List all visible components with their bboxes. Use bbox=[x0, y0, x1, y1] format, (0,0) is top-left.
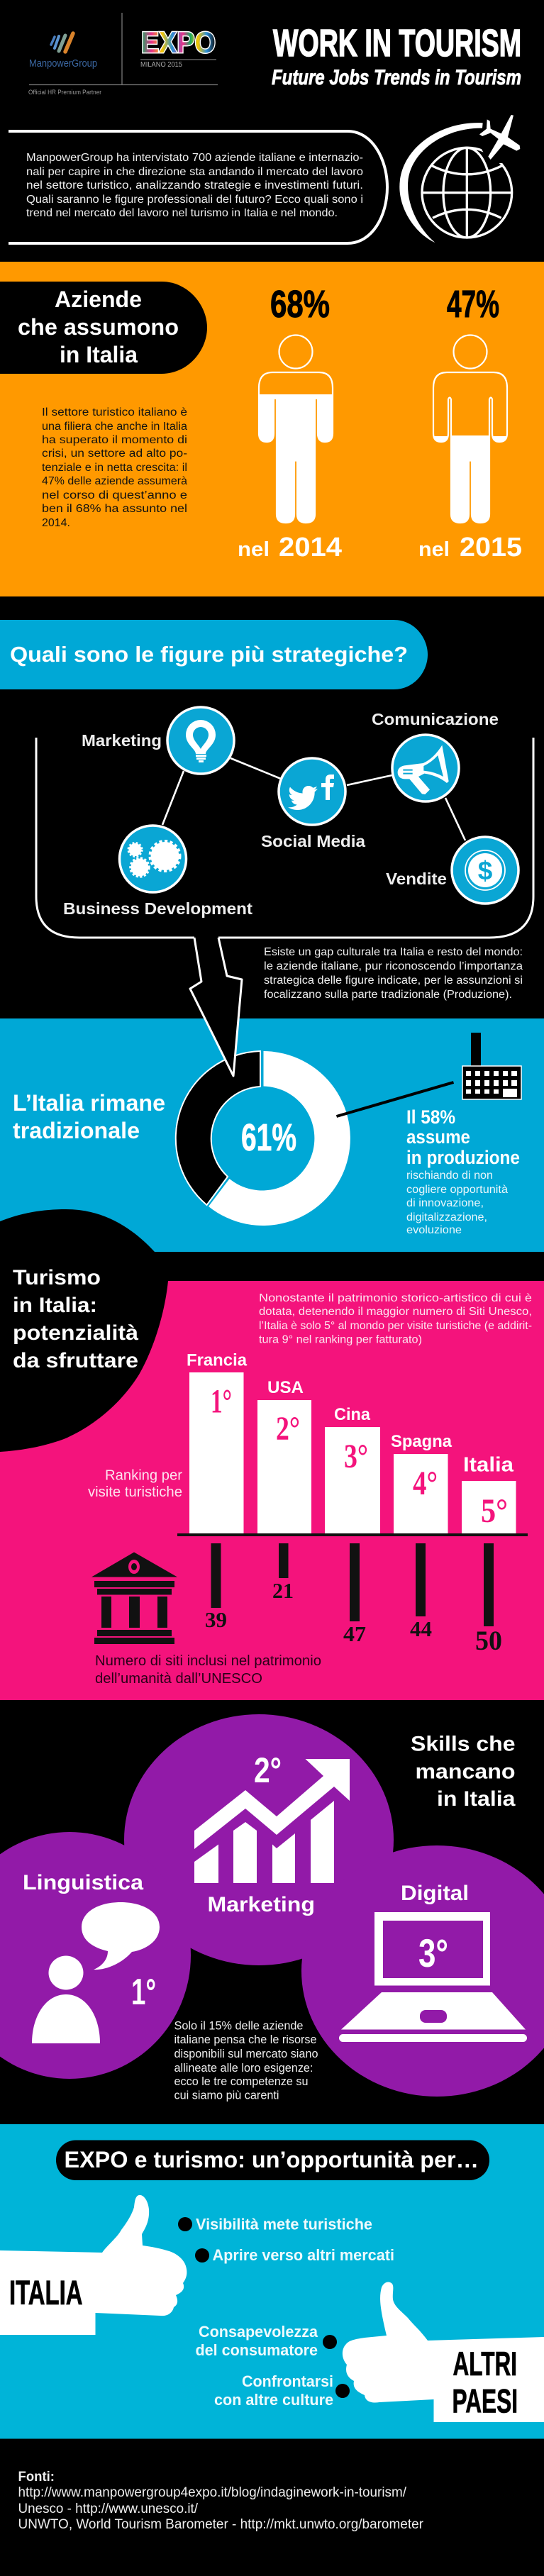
bullet: Visibilità: Visibilità mete turistiche bbox=[196, 2216, 372, 2233]
panel: header bbox=[9, 13, 521, 243]
callout detail bbox=[406, 1170, 508, 1236]
heading: da sfruttare bbox=[13, 1349, 138, 1372]
intro text: nali per capire in che direzione sta andando il mercato del lavoro bbox=[26, 166, 363, 178]
sources: UNWTO, World Tourism Barometer - http://mkt.unwto.org/barometer bbox=[18, 2517, 424, 2532]
logo: EXPO Milano 2015: EXPO bbox=[141, 26, 216, 59]
node: Marketing bbox=[82, 707, 234, 774]
ranking label: visite turistiche bbox=[88, 1484, 182, 1500]
bar chart: ranking bbox=[177, 1350, 528, 1536]
bullet: Consapevolezza: del consumatore bbox=[196, 2341, 318, 2359]
label: nel 2014: 2014 bbox=[279, 533, 342, 562]
icon: factory bbox=[462, 1033, 521, 1099]
icon: light bulb bbox=[186, 720, 216, 762]
bar chart: UNESCO sites: 50 bbox=[475, 1626, 502, 1656]
ranking label: Ranking per bbox=[105, 1468, 182, 1484]
node: Vendite bbox=[386, 837, 518, 904]
intro text bbox=[259, 1292, 532, 1346]
icon: temple bbox=[91, 1552, 177, 1644]
callout detail: rischiando di non bbox=[406, 1170, 493, 1182]
blob: Digital bbox=[301, 1845, 544, 2097]
heading: mancano bbox=[416, 1760, 515, 1783]
callout: 58%: in produzione bbox=[406, 1147, 520, 1168]
cyan background bbox=[0, 2124, 544, 2438]
body text: 2014. bbox=[42, 517, 70, 529]
node: Comunicazione: Comunicazione bbox=[372, 710, 499, 728]
bracket and arrow bbox=[36, 738, 533, 1076]
icon: globe and plane bbox=[399, 115, 520, 243]
label: nel 2015 bbox=[418, 533, 522, 562]
donut chart bbox=[176, 1051, 350, 1226]
icon: megaphone bbox=[398, 745, 449, 794]
heading: Turismo bbox=[13, 1266, 101, 1289]
callout detail: di innovazione, bbox=[406, 1197, 484, 1209]
bar: Francia: Francia bbox=[187, 1350, 248, 1370]
heading bbox=[13, 1266, 138, 1372]
sources: Fonti: bbox=[18, 2470, 55, 2485]
intro text bbox=[26, 152, 363, 219]
callout detail: evoluzione bbox=[406, 1224, 462, 1236]
gap text: strategica delle figure indicate, per le assunzioni si bbox=[264, 975, 523, 987]
skills text: disponibili sul mercato siano bbox=[174, 2048, 318, 2060]
bar: Italia: 5° bbox=[481, 1492, 508, 1530]
bar: Italia: Italia bbox=[463, 1454, 514, 1477]
partner label: Official HR Premium Partner bbox=[28, 89, 101, 96]
intro text: nel settore turistico, analizzando strategie e investimenti futuri. bbox=[26, 179, 363, 191]
intro text: trend nel mercato del lavoro nel turismo in Italia e nel mondo. bbox=[26, 207, 338, 219]
logo: EXPO Milano 2015: MILANO 2015 bbox=[140, 60, 182, 69]
heading: Skills che bbox=[411, 1732, 515, 1756]
icon: person 68% filled bbox=[258, 335, 333, 523]
rank: 1°: 1° bbox=[131, 1972, 156, 2013]
body text: ben il 68% ha assunto nel bbox=[42, 503, 187, 515]
label: Digital: Digital bbox=[401, 1882, 469, 1905]
UNESCO caption bbox=[95, 1653, 321, 1687]
bar: Italia bbox=[462, 1454, 516, 1533]
callout detail: digitalizzazione, bbox=[406, 1211, 487, 1223]
panel: turismo in Italia bbox=[0, 1209, 544, 1700]
panel: Italia tradizionale bbox=[0, 1018, 544, 1252]
gap text: le aziende italiane, pur riconoscendo l’importanza bbox=[264, 960, 523, 972]
icon: dollar coin bbox=[465, 850, 505, 890]
panel: aziende che assumono bbox=[0, 262, 544, 596]
intro text: dotata, detenendo il maggior numero di Siti Unesco, bbox=[259, 1306, 532, 1318]
bar chart: UNESCO sites: 44 bbox=[410, 1616, 432, 1641]
body text: crisi, un settore ad alto po- bbox=[42, 448, 187, 460]
panel: figure strategiche bbox=[0, 620, 523, 1001]
bar: Spagna: 4° bbox=[413, 1465, 438, 1502]
bullet: Confrontarsi: Confrontarsi bbox=[242, 2372, 333, 2390]
bar: USA: 2° bbox=[276, 1410, 300, 1448]
body text: 47% delle aziende assumerà bbox=[42, 475, 187, 487]
heading bbox=[411, 1732, 516, 1811]
stat: 68%: 68% bbox=[270, 283, 330, 326]
intro frame bbox=[9, 131, 387, 243]
heading pill bbox=[0, 282, 207, 374]
heading pill bbox=[0, 620, 428, 689]
node: Social Media: Social Media bbox=[261, 832, 365, 850]
UNESCO caption: dell’umanità dall’UNESCO bbox=[95, 1671, 262, 1687]
icon: right thumb up, ALTRI PAESI bbox=[343, 2282, 544, 2422]
bar: Cina bbox=[325, 1405, 380, 1533]
bar: USA: USA bbox=[267, 1378, 304, 1397]
heading: in Italia bbox=[437, 1787, 516, 1811]
heading: in Italia: bbox=[13, 1294, 97, 1317]
black corner shape bbox=[0, 1209, 168, 1452]
skills text: ecco le tre competenze su bbox=[174, 2075, 308, 2088]
icon: twitter and facebook bbox=[288, 775, 334, 810]
body text: una filiera che anche in Italia bbox=[42, 421, 187, 433]
skills text: allineate alle loro esigenze: bbox=[174, 2062, 313, 2075]
bar chart: UNESCO sites: 47 bbox=[343, 1621, 366, 1646]
logo divider lines bbox=[29, 13, 218, 85]
bar: Cina: 3° bbox=[344, 1438, 368, 1475]
skills text: italiane pensa che le risorse bbox=[174, 2033, 316, 2046]
panel: skills bbox=[0, 1714, 544, 2102]
heading pill: che assumono bbox=[18, 314, 179, 340]
intro text: tura 9° nel ranking per fatturato) bbox=[259, 1333, 422, 1346]
label: nel 2014 bbox=[238, 533, 342, 562]
bar: Cina: Cina bbox=[334, 1405, 371, 1424]
body text: tenziale e in netta crescita: il bbox=[42, 462, 187, 474]
ranking label bbox=[88, 1468, 182, 1500]
callout: 58%: assume bbox=[406, 1126, 470, 1148]
bar chart: UNESCO sites: 21 bbox=[272, 1578, 294, 1603]
icon: person 47% filled bbox=[433, 335, 507, 523]
node: Business Development bbox=[63, 826, 252, 918]
logo: ManpowerGroup: ManpowerGroup bbox=[29, 57, 97, 70]
network connectors bbox=[162, 758, 465, 840]
body text: nel corso di quest’anno e bbox=[42, 489, 187, 501]
body text: Il settore turistico italiano è bbox=[42, 406, 187, 418]
bar: Francia bbox=[187, 1350, 248, 1533]
label: nel 2015: nel bbox=[418, 538, 450, 561]
heading pill: Aziende bbox=[55, 287, 142, 312]
bar: Francia: 1° bbox=[211, 1383, 232, 1420]
intro text: Nonostante il patrimonio storico-artistico di cui è bbox=[259, 1292, 532, 1304]
sources: Unesco - http://www.unesco.it/ bbox=[18, 2502, 199, 2516]
blob: Linguistica bbox=[0, 1832, 191, 2079]
panel: EXPO e turismo bbox=[0, 2124, 544, 2438]
bar chart: UNESCO sites: 39 bbox=[205, 1607, 227, 1632]
label: nel 2015: 2015 bbox=[460, 533, 522, 562]
orange background bbox=[0, 262, 544, 596]
heading pill: in Italia bbox=[60, 342, 138, 367]
label: Linguistica: Linguistica bbox=[23, 1871, 143, 1894]
pink background bbox=[0, 1281, 544, 1700]
heading: potenzialità bbox=[13, 1321, 138, 1345]
node: Comunicazione bbox=[372, 710, 499, 801]
bar: USA bbox=[257, 1378, 311, 1533]
node: Social Media bbox=[261, 758, 365, 850]
heading: L’Italia rimane bbox=[13, 1090, 165, 1116]
bullet: Confrontarsi bbox=[214, 2372, 350, 2409]
blob: Marketing bbox=[124, 1714, 394, 1965]
icon: left thumb up, ITALIA: ITALIA bbox=[9, 2275, 82, 2312]
donut chart: 61% bbox=[241, 1116, 296, 1159]
gap text: focalizzano sulla parte tradizionale (Produzione). bbox=[264, 989, 512, 1001]
icon: speaking person bbox=[32, 1902, 160, 2043]
heading bbox=[13, 1090, 165, 1143]
skills text: Solo il 15% delle aziende bbox=[174, 2020, 304, 2033]
label: nel 2014: nel bbox=[238, 538, 270, 561]
intro text: ManpowerGroup ha intervistato 700 aziende italiane e internazio- bbox=[26, 152, 363, 164]
bullet: Consapevolezza: Consapevolezza bbox=[199, 2323, 318, 2341]
body text bbox=[42, 406, 187, 529]
icon: gears bbox=[129, 842, 179, 877]
gap text: Esiste un gap culturale tra Italia e resto del mondo: bbox=[264, 946, 523, 958]
stat: 47%: 47% bbox=[447, 283, 499, 326]
bullet: Confrontarsi: con altre culture bbox=[214, 2391, 333, 2409]
axis bbox=[177, 1533, 528, 1536]
UNESCO caption: Numero di siti inclusi nel patrimonio bbox=[95, 1653, 321, 1669]
icon: laptop: 3° bbox=[418, 1931, 448, 1975]
skills text bbox=[174, 2020, 318, 2102]
bullet: Consapevolezza bbox=[196, 2323, 337, 2359]
node: Business Development: Business Development bbox=[63, 899, 252, 918]
heading pill bbox=[56, 2141, 489, 2180]
node: Marketing: Marketing bbox=[82, 731, 162, 750]
rank: 2°: 2° bbox=[254, 1750, 282, 1790]
icon: laptop bbox=[339, 1912, 527, 2042]
bar: Spagna bbox=[391, 1432, 453, 1533]
callout: 58%: Il 58% bbox=[406, 1106, 455, 1128]
label: Marketing: Marketing bbox=[207, 1893, 315, 1916]
icon: dollar coin: $ bbox=[478, 856, 493, 885]
sources bbox=[18, 2470, 424, 2532]
intro text: Quali saranno le figure professionali del futuro? Ecco quali sono i bbox=[26, 194, 363, 206]
logo: ManpowerGroup bbox=[29, 33, 97, 70]
cyan background bbox=[0, 1018, 544, 1252]
icon: growth chart bbox=[194, 1759, 350, 1883]
bar chart: UNESCO sites bbox=[205, 1543, 502, 1656]
gap text bbox=[264, 946, 523, 1001]
node: Vendite: Vendite bbox=[386, 870, 447, 888]
bullet: Aprire: Aprire verso altri mercati bbox=[213, 2246, 394, 2264]
heading pill: Quali sono le figure più strategiche? bbox=[10, 642, 408, 667]
bar: Spagna: Spagna bbox=[391, 1432, 453, 1451]
intro text: l’Italia è solo 5° al mondo per visite turistiche (e addirit- bbox=[259, 1320, 532, 1332]
heading: tradizionale bbox=[13, 1118, 140, 1143]
body text: ha superato il momento di bbox=[42, 434, 187, 446]
callout detail: cogliere opportunità bbox=[406, 1184, 508, 1196]
icon: left thumb up, ITALIA bbox=[0, 2195, 187, 2335]
callout: 58% bbox=[406, 1106, 520, 1168]
skills text: cui siamo più carenti bbox=[174, 2089, 279, 2102]
sources: http://www.manpowergroup4expo.it/blog/indaginework-in-tourism/ bbox=[18, 2485, 407, 2500]
heading pill: EXPO e turismo: un’opportunità per… bbox=[64, 2147, 479, 2172]
leader line bbox=[336, 1082, 454, 1116]
